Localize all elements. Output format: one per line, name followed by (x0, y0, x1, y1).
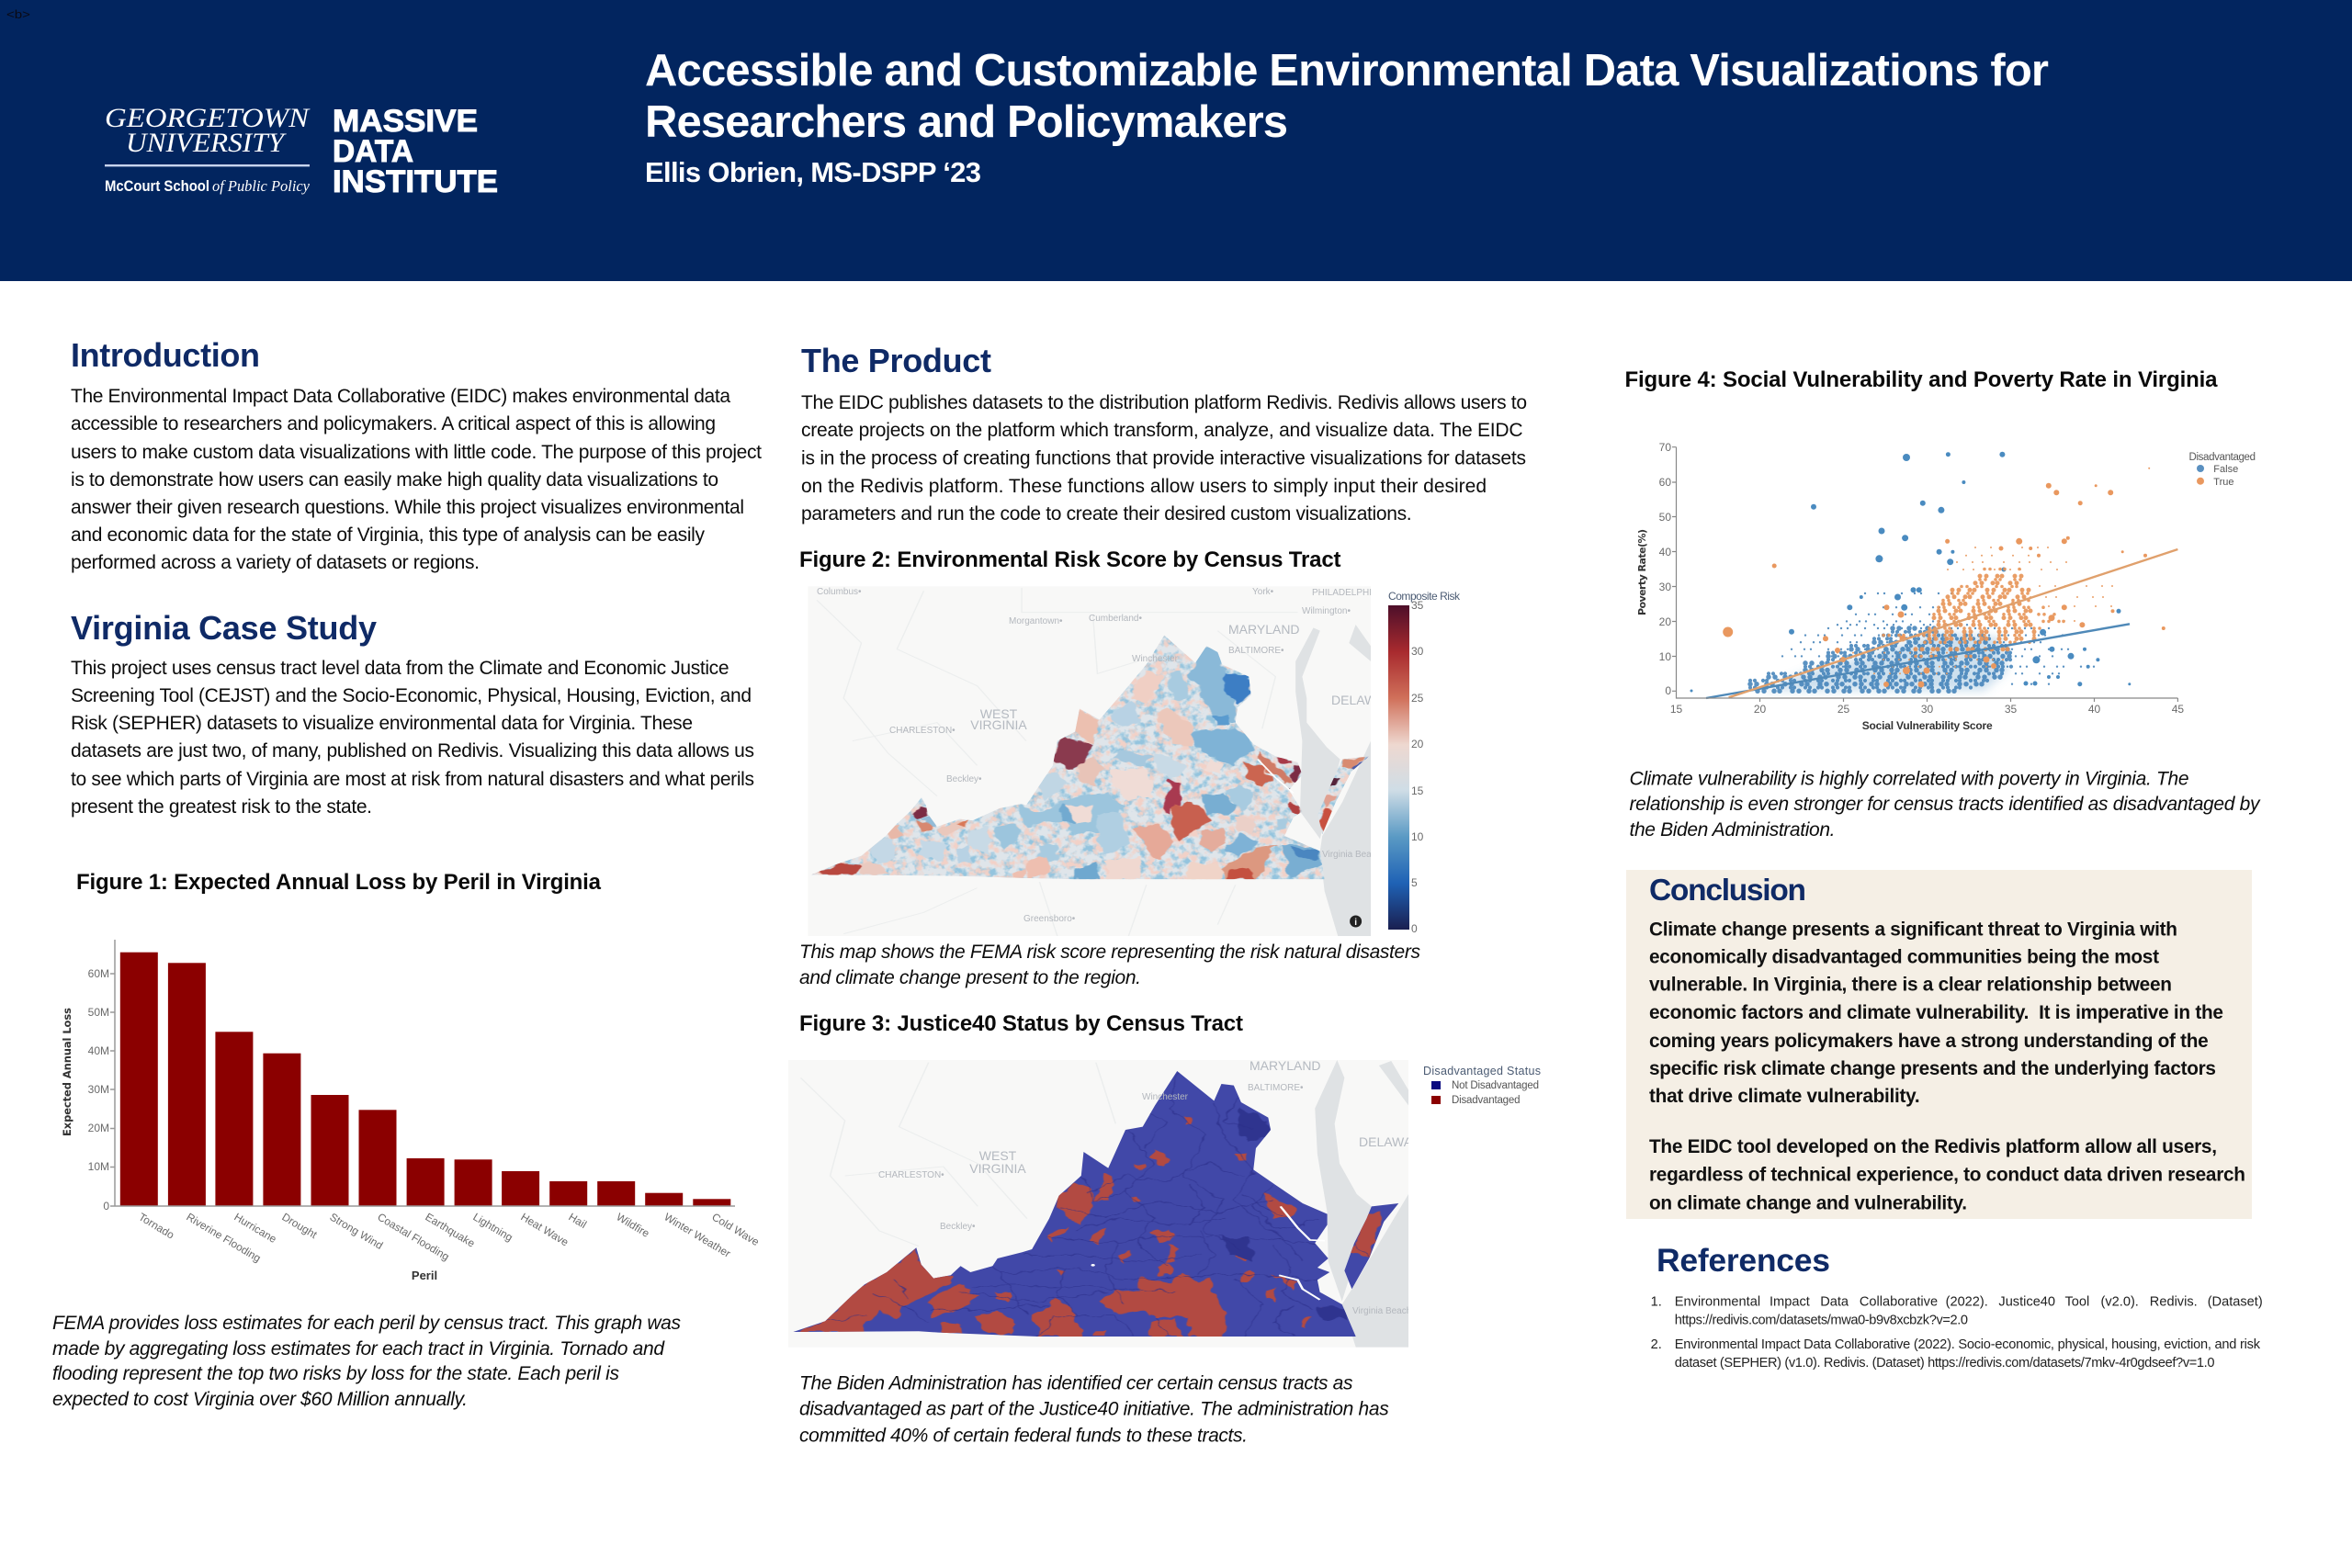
axes (110, 940, 735, 1206)
reference 2: Environmental Impact Data Collaborative (2022). Socio-economic, physical, housing, eviction, and risk (1675, 1337, 2261, 1352)
basemap labels: Winchester (1132, 654, 1179, 664)
legend: disadvantaged status: Disadvantaged Status (1423, 1065, 1541, 1077)
text block: introduction body: and economic data for the state of Virginia, this type of analysis can be easily (71, 525, 706, 546)
colorbar legend: composite risk: Composite Risk (1388, 590, 1461, 603)
text block: introduction body: The Environmental Impact Data Collaborative (EIDC) makes environmental data (71, 386, 730, 407)
panel: conclusion (1626, 870, 2252, 1219)
basemap labels: MARYLAND (1250, 1058, 1321, 1073)
x tick labels: Winter Weather (662, 1211, 733, 1260)
reference 1: 1. (1651, 1295, 1662, 1310)
basemap labels: CHARLESTON• (878, 1170, 944, 1180)
text block: conclusion paragraph 2: The EIDC tool developed on the Redivis platform allow all users, (1649, 1136, 2217, 1157)
caption: figure 3: The Biden Administration has identified cer certain census tracts as (799, 1372, 1353, 1394)
colorbar legend: composite risk: 10 (1411, 830, 1424, 843)
basemap labels: WEST (979, 1148, 1017, 1163)
reference 2 (1651, 1337, 2261, 1371)
colorbar legend: composite risk: 0 (1411, 922, 1418, 935)
header banner (0, 0, 2352, 281)
reference 1: Tool (2065, 1295, 2089, 1310)
dense urban tracts (1224, 1109, 1347, 1320)
basemap labels: CHARLESTON• (889, 726, 956, 736)
heading: figure 2: Figure 2: Environmental Risk Score by Census Tract (799, 547, 1341, 572)
caption: figure 1: made by aggregating loss estimates for each tract in Virginia. Tornado and (52, 1338, 665, 1359)
reference 1: Justice40 (1998, 1295, 2055, 1310)
reference 1: Collaborative (1860, 1295, 1938, 1310)
icon: map info button (1350, 915, 1362, 928)
caption: figure 4: relationship is even stronger for census tracts identified as disadvantaged by (1630, 794, 2261, 815)
basemap labels (817, 587, 1403, 924)
text block: product body: on the Redivis platform. These functions allow users to simply input their desired (801, 476, 1487, 497)
text block: case study body (71, 658, 754, 818)
basemap labels: Beckley• (946, 774, 982, 784)
y tick labels: 20M (88, 1122, 109, 1134)
x tick labels: Cold Wave (709, 1211, 762, 1248)
text block: introduction body: users to make custom data visualizations with little code. The purpose of this project (71, 442, 762, 463)
colorbar legend: composite risk: 25 (1411, 692, 1424, 705)
caption: figure 1: FEMA provides loss estimates for each peril by census tract. This graph was (52, 1313, 682, 1334)
text block: conclusion paragraph 2: on climate change and vulnerability. (1649, 1193, 1967, 1214)
basemap labels: Beckley• (940, 1222, 976, 1232)
colorbar legend: composite risk: 5 (1411, 876, 1418, 889)
reference 2: dataset (SEPHER) (v1.0). Redivis. (Dataset) https://redivis.com/datasets/7mkv-4r0gdseef?v=1.0 (1675, 1356, 2214, 1371)
basemap labels: WEST (980, 706, 1018, 721)
basemap labels: BALTIMORE• (1228, 646, 1284, 656)
mottled tract texture (808, 631, 1371, 882)
blue outliers (1690, 452, 2131, 693)
x tick labels: Coastal Flooding (375, 1211, 452, 1263)
trend lines (1706, 549, 2177, 698)
x tick labels: Wildfire (614, 1211, 652, 1240)
text block: case study body: This project uses census tract level data from the Climate and Economic Justice (71, 658, 729, 679)
basemap labels: MARYLAND (1228, 622, 1300, 637)
basemap labels: Morgantown• (1009, 616, 1063, 626)
legend: disadvantaged status: Not Disadvantaged (1452, 1080, 1539, 1091)
text block: product body: is in the process of creating functions that provide interactive visualizations for datasets (801, 448, 1526, 468)
text block: case study body: Screening Tool (CEJST) and the Socio-Economic, Physical, Housing, Eviction, and (71, 685, 752, 706)
caption: figure 3: disadvantaged as part of the Justice40 initiative. The administration has (799, 1398, 1389, 1420)
caption: figure 4: Climate vulnerability is highly correlated with poverty in Virginia. The (1630, 768, 2188, 790)
basemap labels: Virginia Beach (1352, 1306, 1411, 1316)
y tick labels: 40 (1659, 546, 1671, 558)
heading: conclusion: Conclusion (1649, 874, 1806, 908)
reference 1: (v2.0). (2100, 1295, 2139, 1310)
logo: Georgetown McCourt School: of Public Policy (212, 177, 310, 195)
caption: figure 4 (1630, 768, 2261, 840)
text block: introduction body: is to demonstrate how users can easily make high quality data visualizations to (71, 469, 718, 491)
text block: conclusion paragraph 1: specific risk climate change presents and the underlying factors (1649, 1058, 2216, 1079)
axes (1672, 447, 2177, 702)
x tick labels: Drought (279, 1211, 320, 1242)
y tick labels: 50M (88, 1006, 109, 1019)
map: composite risk choropleth (808, 586, 1461, 936)
reference 1 (1651, 1295, 2263, 1328)
y tick labels: 60 (1659, 476, 1671, 489)
title: Accessible and Customizable Environmental Data Visualizations for (645, 46, 2049, 96)
text block: conclusion paragraph 1: economic factors and climate vulnerability. It is imperative in the (1649, 1002, 2223, 1023)
basemap labels: PHILADELPHIA (1312, 588, 1378, 598)
logo: Massive Data Institute: MASSIVE (333, 104, 478, 139)
basemap labels: Cumberland• (1089, 614, 1142, 624)
logo: Georgetown McCourt School: McCourt School (105, 177, 209, 195)
y axis title: Poverty Rate(%) (1636, 529, 1648, 615)
basemap labels: Winchester (1142, 1092, 1189, 1102)
colorbar legend: composite risk: 15 (1411, 784, 1424, 797)
title (645, 46, 2049, 147)
basemap labels: BALTIMORE• (1248, 1083, 1304, 1093)
x tick labels: Riverine Flooding (184, 1211, 263, 1265)
basemap labels: DELAWARE (1359, 1134, 1430, 1149)
y tick labels: 40M (88, 1044, 109, 1057)
caption: figure 2 (799, 942, 1420, 988)
text block: product body: The EIDC publishes datasets to the distribution platform Redivis. Redivis allows users to (801, 392, 1527, 413)
y tick labels: 20 (1659, 615, 1671, 628)
basemap labels: Virginia Beach (1322, 850, 1381, 860)
x axis title: Social Vulnerability Score (1862, 719, 1993, 732)
basemap labels: Greensboro• (1023, 914, 1076, 924)
x tick labels: Hurricane (232, 1211, 279, 1246)
text block: conclusion paragraph 1: coming years policymakers have a strong understanding of the (1649, 1031, 2209, 1052)
heading: Virginia case study: Virginia Case Study (71, 609, 377, 647)
caption: figure 3: committed 40% of certain federal funds to these tracts. (799, 1426, 1248, 1446)
disadvantaged tracts (793, 1118, 1382, 1337)
logo: Georgetown McCourt School: GEORGETOWN (105, 103, 311, 133)
x tick labels: 15 (1670, 703, 1682, 716)
y tick labels: 30M (88, 1083, 109, 1096)
title: Researchers and Policymakers (645, 97, 1288, 147)
text block: conclusion paragraph 1: vulnerable. In Virginia, there is a clear relationship between (1649, 974, 2172, 996)
legend: disadvantaged status: Disadvantaged (1452, 1095, 1520, 1106)
heading: figure 3: Figure 3: Justice40 Status by Census Tract (799, 1011, 1243, 1036)
basemap labels: Wilmington• (1302, 606, 1351, 616)
x tick labels: Lightning (470, 1211, 515, 1244)
text block: product body (801, 392, 1527, 525)
stray markup tag: <b> (6, 7, 30, 21)
x tick labels: Tornado (136, 1211, 177, 1242)
reference 1: Impact (1770, 1295, 1810, 1310)
bars (120, 953, 730, 1206)
text block: case study body: present the greatest risk to the state. (71, 796, 372, 818)
logo: Massive Data Institute: DATA (333, 134, 413, 169)
y tick labels: 30 (1659, 581, 1671, 593)
text block: product body: parameters and run the code to create their desired custom visualizations. (801, 503, 1412, 525)
blue points: not disadvantaged (1750, 593, 2095, 691)
panel: introduction (71, 336, 762, 573)
y tick labels (88, 967, 109, 1213)
colorbar legend: composite risk (1388, 590, 1461, 935)
y axis title: Expected Annual Loss (61, 1008, 74, 1136)
text block: introduction body: accessible to researchers and policymakers. A critical aspect of this is allowing (71, 413, 716, 434)
orange points: disadvantaged (1838, 547, 2113, 673)
heading: the product: The Product (801, 342, 991, 379)
text block: conclusion paragraph 2 (1649, 1136, 2245, 1214)
x tick labels: 25 (1838, 703, 1849, 716)
x tick labels: Earthquake (423, 1211, 478, 1250)
reference 1: (2022). (1946, 1295, 1988, 1310)
y tick labels: 0 (1665, 684, 1671, 697)
text block: introduction body: answer their given research questions. While this project visualizes environmental (71, 497, 744, 518)
panel: Virginia case study (71, 609, 754, 818)
x tick labels: 30 (1921, 703, 1933, 716)
map: Justice40 disadvantaged status (788, 1058, 1541, 1348)
legend: disadvantaged status (1423, 1065, 1541, 1106)
heading: figure 4: Figure 4: Social Vulnerability and Poverty Rate in Virginia (1624, 367, 2218, 392)
y tick labels: 0 (103, 1200, 109, 1213)
basemap labels: DELAWARE (1331, 693, 1403, 707)
heading: figure 1: Figure 1: Expected Annual Loss by Peril in Virginia (76, 870, 602, 895)
caption: figure 2: and climate change present to the region. (799, 967, 1141, 988)
x tick labels: 40 (2088, 703, 2100, 716)
heading: references: References (1657, 1242, 1830, 1279)
panel: references (1651, 1242, 2263, 1371)
y tick labels: 10M (88, 1160, 109, 1173)
text block: product body: create projects on the platform which transform, analyze, and visualize data. The EIDC (801, 420, 1523, 441)
y tick labels: 70 (1659, 441, 1671, 454)
text block: conclusion paragraph 2: regardless of technical experience, to conduct data driven research (1649, 1165, 2245, 1186)
tract boundaries (825, 1071, 1369, 1337)
colorbar legend: composite risk: 30 (1411, 645, 1424, 658)
basemap and risk tracts (808, 586, 1403, 936)
legend: disadvantaged: True (2213, 477, 2234, 488)
basemap labels (878, 1058, 1430, 1316)
basemap labels: VIRGINIA (970, 717, 1027, 732)
colorbar legend: composite risk: 20 (1411, 738, 1424, 750)
caption: figure 1: flooding represent the top two risks by loss for the state. Each peril is (52, 1363, 619, 1384)
reference 2: 2. (1651, 1337, 1662, 1352)
x tick labels: Hail (566, 1211, 589, 1231)
text block: introduction body: performed across a variety of datasets or regions. (71, 552, 480, 573)
caption: figure 2: This map shows the FEMA risk score representing the risk natural disasters (799, 942, 1420, 963)
logo: Georgetown McCourt School: UNIVERSITY (126, 128, 287, 158)
heading: introduction: Introduction (71, 336, 260, 374)
text block: case study body: datasets are just two, of many, published on Redivis. Visualizing this data allows us (71, 740, 754, 761)
author: Ellis Obrien, MS-DSPP ‘23 (645, 156, 981, 188)
basemap labels: York• (1252, 587, 1274, 597)
bar chart: expected annual loss by peril (61, 940, 762, 1282)
text block: conclusion paragraph 1: economically disadvantaged communities being the most (1649, 946, 2159, 967)
text block: introduction body (71, 386, 762, 573)
panel: the product (801, 342, 1527, 525)
logo: Massive Data Institute (333, 104, 498, 199)
reference 1: https://redivis.com/datasets/mwa0-b9v8xcbzk?v=2.0 (1675, 1314, 1968, 1328)
x tick labels (136, 1211, 762, 1265)
logo: Massive Data Institute: INSTITUTE (333, 164, 498, 199)
caption: figure 1: expected to cost Virginia over $60 Million annually. (52, 1389, 468, 1410)
y tick labels: 50 (1659, 511, 1671, 524)
basemap labels: VIRGINIA (969, 1161, 1026, 1176)
text block: case study body: Risk (SEPHER) datasets to visualize environmental data for Virginia. These (71, 713, 693, 734)
text block: conclusion paragraph 1: Climate change presents a significant threat to Virginia with (1649, 919, 2177, 940)
reds (1053, 737, 1092, 771)
caption: figure 1 (52, 1313, 682, 1410)
reference 1: Environmental (1675, 1295, 1760, 1310)
logo: Georgetown McCourt School (105, 103, 311, 195)
orange outliers (1723, 468, 2165, 687)
x tick labels: Strong Wind (327, 1211, 385, 1252)
legend: disadvantaged: Disadvantaged (2188, 452, 2256, 463)
caption: figure 4: the Biden Administration. (1630, 819, 1836, 840)
reference 1: Data (1820, 1295, 1849, 1310)
text block: case study body: to see which parts of Virginia are most at risk from natural disasters and what perils (71, 769, 754, 790)
y tick labels: 60M (88, 967, 109, 980)
legend: disadvantaged (2188, 452, 2256, 488)
reference 1: Redivis. (2150, 1295, 2198, 1310)
reference 1: (Dataset) (2208, 1295, 2263, 1310)
x tick labels: 35 (2005, 703, 2017, 716)
dense cloud underlay (1759, 632, 2007, 691)
x axis title: Peril (412, 1269, 437, 1282)
caption: figure 3 (799, 1372, 1389, 1446)
y tick labels (1659, 441, 1671, 697)
text block: conclusion paragraph 1 (1649, 919, 2223, 1107)
x tick labels: 45 (2172, 703, 2184, 716)
icon: map info button: i (1354, 918, 1357, 928)
pinks (1075, 710, 1099, 744)
x tick labels: Heat Wave (518, 1211, 571, 1249)
x tick labels: 20 (1754, 703, 1766, 716)
scatter plot: social vulnerability vs poverty rate (1636, 441, 2256, 732)
legend: disadvantaged: False (2213, 464, 2238, 475)
blues (1017, 793, 1122, 833)
x tick labels (1670, 703, 2184, 716)
text block: conclusion paragraph 1: that drive climate vulnerability. (1649, 1086, 1920, 1107)
colorbar legend: composite risk: 35 (1411, 599, 1424, 612)
basemap labels: Columbus• (817, 587, 862, 597)
y tick labels: 10 (1659, 650, 1671, 663)
